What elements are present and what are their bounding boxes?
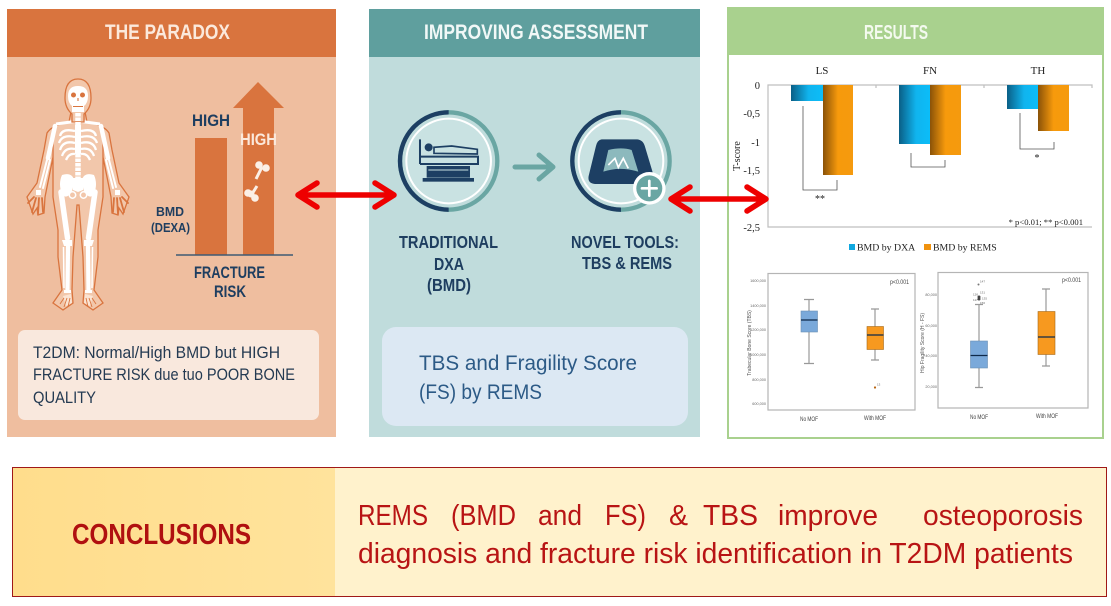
conclusion text: REMS xyxy=(358,500,428,532)
label: BMD DEXA: BMD xyxy=(156,205,184,219)
box plot: TBS: 1200,000 xyxy=(750,328,766,332)
box plot: hip fragility score: 80,000 xyxy=(925,293,937,297)
label: novel tools xyxy=(571,232,679,273)
chart legend: BMD by REMS xyxy=(933,242,997,254)
label: traditional DXA: (BMD) xyxy=(427,275,471,295)
box plot: TBS: 13 xyxy=(877,382,881,386)
bar chart: T-score: * p<0.01; ** p<0.001 xyxy=(1009,217,1083,227)
box plot: hip fragility score: 156 xyxy=(980,301,985,305)
heading: the paradox: THE PARADOX xyxy=(105,21,230,44)
heading: improving assessment: IMPROVING ASSESSMENT xyxy=(424,21,648,44)
bar chart: T-score: 0 xyxy=(755,81,760,92)
box plot: TBS: 800,000 xyxy=(752,378,766,382)
box plot: hip fragility score xyxy=(920,272,1088,421)
bar chart: T-score: T-score xyxy=(732,141,743,171)
box plot: TBS xyxy=(747,274,915,423)
bar chart: T-score xyxy=(732,65,1092,254)
bar chart: T-score: FN xyxy=(923,65,937,77)
box plot: hip fragility score: 20,000 xyxy=(925,385,937,389)
bar chart: T-score: -0,5 xyxy=(743,109,760,120)
conclusion text: TBS xyxy=(703,500,758,532)
box plot: hip fragility score: 60,000 xyxy=(925,324,937,328)
box plot: hip fragility score: 117 xyxy=(973,298,978,302)
label: BMD DEXA xyxy=(151,205,190,235)
box plot: hip fragility score: 131 xyxy=(980,290,985,294)
label: fracture risk xyxy=(194,263,265,301)
conclusion text: & xyxy=(669,500,688,532)
box plot: hip fragility score: No MOF xyxy=(970,414,988,421)
conclusion text: and xyxy=(538,500,582,532)
text box: TBS and FS: (FS) by REMS xyxy=(419,381,542,404)
bar: BMD xyxy=(195,138,227,255)
box plot: hip fragility score: 147 xyxy=(980,280,985,284)
label: BMD DEXA: (DEXA) xyxy=(151,221,190,235)
panel: improving assessment xyxy=(369,9,700,437)
conclusion text: improve xyxy=(778,500,878,532)
icon: human skeleton xyxy=(27,79,129,310)
label: high fracture risk: HIGH xyxy=(240,130,277,149)
conclusion text: diagnosis and fracture risk identification in T2DM patients xyxy=(358,538,1073,570)
text box: T2DM: QUALITY xyxy=(33,388,96,407)
axis line xyxy=(176,254,293,256)
box plot: TBS: 1000,000 xyxy=(750,353,766,357)
text box: TBS and FS xyxy=(382,327,688,426)
box plot: TBS: Trabecular Bone Score (TBS) xyxy=(747,310,753,376)
box plot: TBS: 1600,000 xyxy=(750,279,766,283)
heading: improving assessment xyxy=(369,9,700,57)
chart legend: BMD by DXA xyxy=(857,242,915,254)
heading: results: RESULTS xyxy=(864,22,928,44)
icon: DXA scanner xyxy=(400,112,497,210)
bar chart: T-score: ** xyxy=(815,194,825,205)
box plot: hip fragility score: p<0.001 xyxy=(1062,277,1081,284)
box plot: hip fragility score: 135 xyxy=(982,296,987,300)
arrow bar: fracture risk xyxy=(233,82,284,255)
text box: TBS and FS: TBS and Fragility Score xyxy=(419,352,637,375)
panel: conclusions xyxy=(12,468,1106,596)
label: high BMD: HIGH xyxy=(192,111,230,130)
bar chart: T-score: -1 xyxy=(751,138,760,149)
conclusion text: (BMD xyxy=(451,500,516,532)
label: fracture risk: RISK xyxy=(214,282,247,301)
bar chart: T-score: TH xyxy=(1031,65,1045,77)
panel: the paradox xyxy=(7,9,336,437)
bar chart: T-score: * xyxy=(1034,153,1040,164)
label: novel tools: NOVEL TOOLS: xyxy=(571,232,679,252)
box plot: TBS: 1400,000 xyxy=(750,304,766,308)
text box: T2DM: T2DM: Normal/High BMD but HIGH xyxy=(33,343,280,362)
heading: conclusions xyxy=(13,468,335,596)
heading: results xyxy=(727,7,1104,55)
box plot: hip fragility score: Hip Fragility Score (H - FS) xyxy=(920,313,926,373)
label: novel tools: TBS & REMS xyxy=(582,253,672,273)
text box: T2DM xyxy=(18,330,319,420)
heading: the paradox xyxy=(7,9,336,57)
box plot: hip fragility score: 126 xyxy=(973,292,978,296)
box plot: TBS: No MOF xyxy=(800,416,818,423)
box plot: TBS: p<0.001 xyxy=(890,279,909,286)
label: traditional DXA: TRADITIONAL xyxy=(399,232,498,252)
box plot: TBS: 600,000 xyxy=(752,402,766,406)
panel: results xyxy=(727,7,1104,438)
label: traditional DXA xyxy=(399,232,498,295)
conclusion text: FS) xyxy=(605,500,646,532)
box plot: hip fragility score: 40,000 xyxy=(925,354,937,358)
bar chart: T-score: LS xyxy=(816,65,828,77)
conclusion text: osteoporosis xyxy=(923,500,1083,532)
label: traditional DXA: DXA xyxy=(434,254,464,274)
heading: conclusions: CONCLUSIONS xyxy=(72,519,251,551)
arrow: assessment to results xyxy=(671,187,766,211)
bar chart: T-score: -1,5 xyxy=(743,166,760,177)
box plot: hip fragility score: With MOF xyxy=(1036,413,1058,420)
icon: ultrasound with plus xyxy=(572,112,670,210)
icon: broken bone xyxy=(244,161,270,202)
bar chart: T-score: -2,5 xyxy=(743,223,760,234)
box plot: TBS: With MOF xyxy=(864,415,886,422)
arrow: paradox to assessment xyxy=(298,183,394,207)
arrow: DXA to novel tools xyxy=(515,155,553,179)
conclusion text xyxy=(358,500,1083,570)
text box: T2DM: FRACTURE RISK due tuo POOR BONE xyxy=(33,365,295,384)
label: fracture risk: FRACTURE xyxy=(194,263,265,282)
chart legend xyxy=(849,242,997,254)
